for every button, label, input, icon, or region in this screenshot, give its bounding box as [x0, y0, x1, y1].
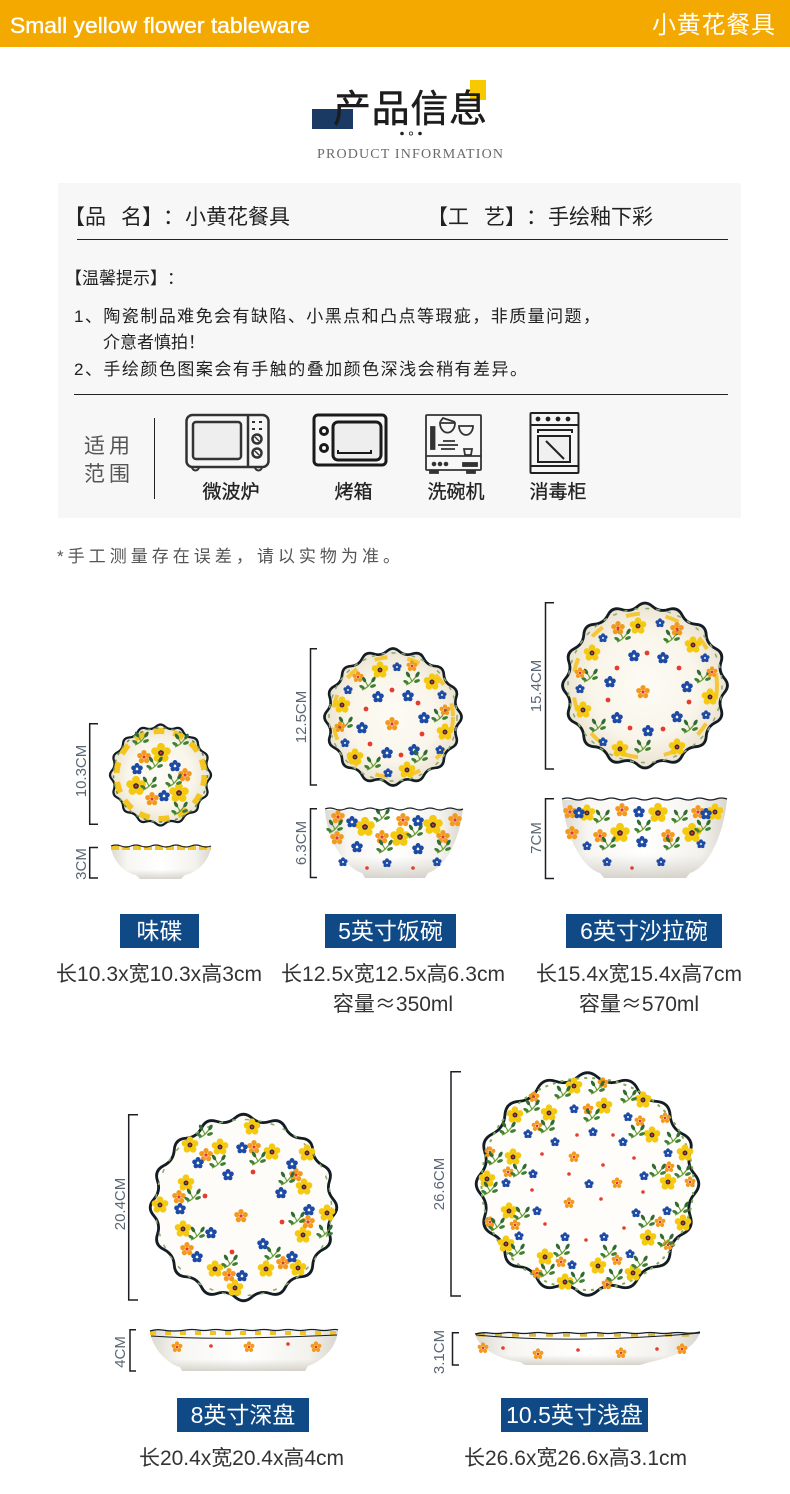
tag: shallow plate: 10.5英寸浅盘 — [506, 1402, 643, 1428]
product: salad bowl — [528, 603, 742, 1018]
dimension: 26.6CM — [431, 1072, 461, 1296]
salad bowl top view — [563, 603, 727, 768]
tips text: 【温馨提示】： — [65, 269, 184, 288]
dimension: 10.3CM — [73, 724, 98, 824]
dimension: 15.4CM: 15.4CM — [528, 660, 545, 712]
sauce dish side view — [111, 845, 211, 879]
icon: microwave — [186, 415, 268, 470]
deep plate side view — [150, 1330, 338, 1371]
tag: deep plate — [177, 1398, 309, 1432]
icon: dishwasher — [426, 415, 481, 473]
dimension: 3.1CM: 3.1CM — [431, 1330, 448, 1374]
dishwasher label: 洗碗机 — [427, 481, 485, 503]
title: product information — [312, 80, 503, 162]
dimension: 6.3CM — [293, 809, 317, 878]
header bar: Small yellow flower tableware — [10, 13, 310, 38]
dimension: 7CM: 7CM — [528, 822, 545, 854]
product name row: 小黄花餐具 — [185, 206, 290, 229]
size caption: rice bowl: 容量≈350ml — [333, 988, 453, 1018]
icon: oven — [314, 415, 386, 465]
deep plate top view — [150, 1114, 337, 1301]
dimension: 3.1CM — [431, 1330, 459, 1374]
product name row: 【品 — [64, 206, 106, 229]
size caption: rice bowl — [281, 963, 505, 1018]
product name row: 【工 — [427, 206, 469, 229]
dimension: 26.6CM: 26.6CM — [431, 1158, 448, 1210]
shallow plate side view — [475, 1332, 700, 1365]
tag: salad bowl: 6英寸沙拉碗 — [580, 918, 708, 944]
tag: sauce dish — [120, 914, 199, 948]
tag: rice bowl: 5英寸饭碗 — [338, 918, 443, 944]
rice bowl top view — [324, 648, 462, 786]
dimension: 4CM: 4CM — [112, 1336, 129, 1368]
dimension: 6.3CM: 6.3CM — [293, 821, 310, 865]
usage scope label: 范围 — [84, 463, 130, 486]
size caption: salad bowl — [536, 963, 742, 1018]
sterilizer label: 消毒柜 — [529, 481, 587, 503]
product name row: 手绘釉下彩 — [548, 206, 653, 229]
dimension: 3CM: 3CM — [73, 848, 90, 880]
tag: salad bowl — [566, 914, 722, 948]
product name row: 名】： — [121, 206, 184, 229]
usage scope label — [84, 435, 130, 486]
icon: sterilizer cabinet — [530, 413, 579, 473]
tips text: 2、手绘颜色图案会有手触的叠加颜色深浅会稍有差异。 — [74, 360, 527, 379]
usage scope label: 适用 — [84, 435, 130, 458]
product: 8 inch deep plate — [112, 1114, 344, 1470]
measurement note: *手工测量存在误差，请以实物为准。 — [57, 547, 400, 566]
title: product information: 产品信息 — [333, 89, 487, 131]
shallow plate top view — [476, 1073, 699, 1295]
title: product information: PRODUCT INFORMATION — [317, 147, 503, 162]
dimension: 12.5CM — [293, 649, 317, 785]
size caption: salad bowl: 容量≈570ml — [579, 988, 699, 1018]
size caption: sauce dish: 长10.3x宽10.3x高3cm — [56, 963, 262, 986]
dimension: 15.4CM — [528, 603, 554, 769]
dimension: 20.4CM — [112, 1115, 138, 1300]
product: 10.5 inch shallow plate — [431, 1072, 700, 1470]
size caption: rice bowl: 长12.5x宽12.5x高6.3cm — [281, 963, 505, 986]
sauce dish top view — [110, 725, 211, 825]
header bar — [0, 0, 790, 47]
dimension: 3CM — [73, 848, 98, 880]
size caption: shallow plate: 长26.6x宽26.6x高3.1cm — [464, 1447, 687, 1470]
dimension: 20.4CM: 20.4CM — [112, 1178, 129, 1230]
tips text: 1、陶瓷制品难免会有缺陷、小黑点和凸点等瑕疵，非质量问题， — [74, 307, 600, 326]
product name row: 艺】： — [484, 206, 547, 229]
oven label: 烤箱 — [334, 481, 373, 503]
size caption: salad bowl: 长15.4x宽15.4x高7cm — [536, 963, 742, 986]
microwave label: 微波炉 — [202, 481, 260, 503]
dimension: 7CM — [528, 799, 554, 878]
size caption: deep plate: 长20.4x宽20.4x高4cm — [139, 1447, 344, 1470]
tag: rice bowl — [325, 914, 456, 948]
header bar: 小黄花餐具 — [652, 12, 775, 39]
panel: product details — [58, 183, 741, 518]
tag: sauce dish: 味碟 — [136, 918, 182, 944]
dimension: 10.3CM: 10.3CM — [73, 745, 90, 797]
dimension: 4CM — [112, 1330, 136, 1371]
tag: deep plate: 8英寸深盘 — [191, 1402, 295, 1428]
rice bowl side view — [325, 808, 463, 878]
tips text — [65, 269, 600, 379]
salad bowl side view — [562, 798, 727, 878]
dimension: 12.5CM: 12.5CM — [293, 691, 310, 743]
tips text: 介意者慎拍！ — [103, 333, 205, 352]
product: sauce dish — [56, 724, 262, 986]
product: rice bowl — [281, 648, 505, 1018]
